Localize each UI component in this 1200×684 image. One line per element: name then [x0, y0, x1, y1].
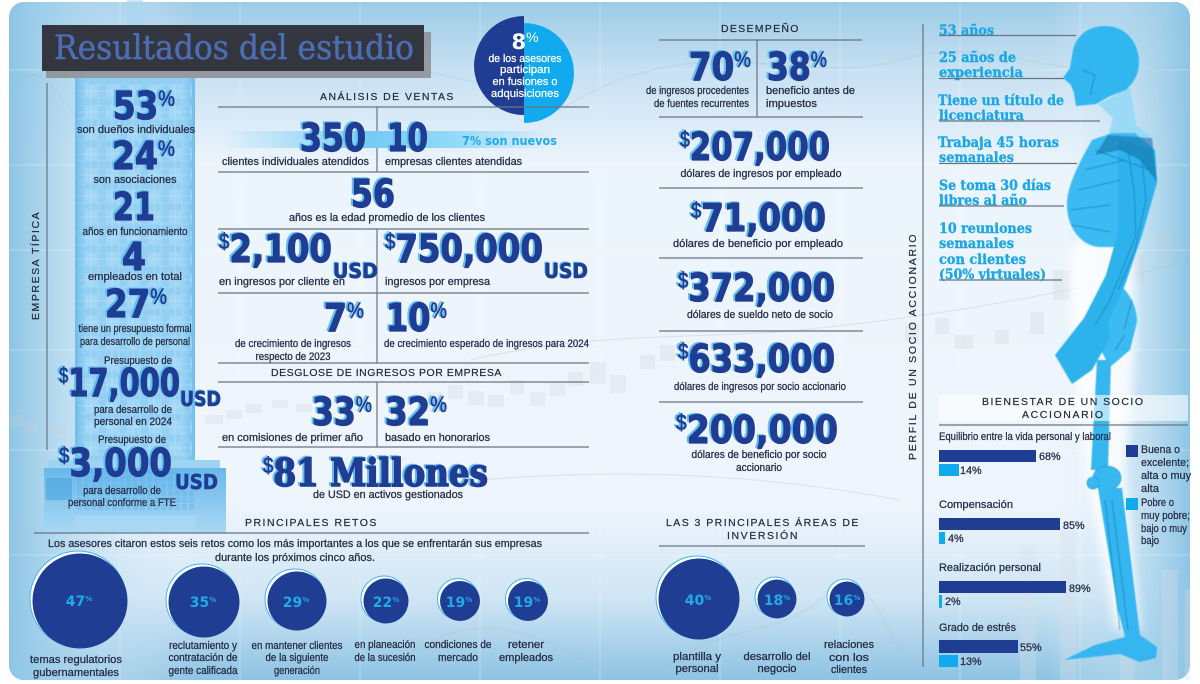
circle: 47% [30, 551, 128, 679]
stat: 38%: 38 [767, 45, 820, 89]
arm and hand [1055, 140, 1157, 384]
icon: tower illustration [44, 0, 226, 533]
stat: 21: 21 [113, 185, 155, 229]
stat: $81 Millones: 81 Millones [274, 450, 488, 495]
stat: 27%: % [150, 284, 167, 309]
stat: $633,000: $ [678, 339, 688, 364]
circle: 35%: gente calificada [168, 665, 238, 677]
stat: 350 clientes: clientes individuales atendidos [222, 156, 370, 168]
stat: $71,000 [673, 196, 843, 250]
legend: excelente; [1141, 457, 1189, 469]
circle: 22%: de la sucesión [354, 652, 416, 664]
stat: 38%: beneficio antes de [766, 85, 855, 97]
fact: 25 años de experiencia: experiencia [939, 65, 1023, 81]
fact: 45 horas semanales: Trabaja 45 horas [938, 135, 1059, 151]
stat: 53% [77, 84, 196, 136]
stat: 4: 4 [122, 235, 146, 279]
panel: perfil de un socio accionario [907, 22, 1100, 667]
heading: bienestar [939, 395, 1188, 421]
stat: $17,000 USD: $ [59, 363, 68, 388]
fact: 10 reuniones semanales: 10 reuniones [939, 221, 1032, 237]
stat: $200,000: accionario [736, 462, 782, 474]
legend: alta o muy [1141, 470, 1192, 482]
circle: 40% [656, 556, 740, 675]
callout: 8% de los asesores: 8 [511, 30, 526, 54]
highlight bar [222, 131, 552, 148]
circle: 18%: 18 [764, 593, 783, 609]
stat: 27%: 27 [105, 282, 158, 326]
circle: 29%: generación [274, 665, 320, 677]
circle: 35%: 35 [190, 595, 209, 611]
circle: 19% retener: retener [508, 639, 544, 651]
chart: grado de estrés [939, 622, 1042, 668]
stat: 70%: 70 [689, 45, 742, 89]
stat: $17,000 USD: 17,000 [68, 361, 180, 405]
chart: compensación: 4% [948, 533, 964, 545]
fact: título de licenciatura: Tiene un título de [938, 93, 1064, 109]
panel: bienestar de un socio accionario [939, 395, 1192, 668]
circle: 22%: en planeación [354, 639, 416, 651]
title: Resultados del estudio [54, 28, 414, 68]
stat: 24%: % [158, 136, 175, 161]
stat: $200,000: dólares de beneficio por socio [692, 449, 826, 461]
intro text [48, 538, 543, 564]
stat: 32%: % [430, 392, 447, 417]
heading: áreas de inversión [666, 516, 861, 542]
chart: realización personal: 2% [945, 596, 961, 608]
chart: realización personal [939, 562, 1091, 608]
stat: 7%: respecto de 2023 [256, 351, 330, 363]
panel: las 3 principales áreas de inversión [656, 516, 875, 676]
chart: grado de estrés: 55% [1020, 642, 1042, 654]
chart: grado de estrés: 13% [960, 656, 982, 668]
stat: 10%: de crecimiento esperado de ingresos para 2024 [384, 338, 589, 350]
stat: $17,000 USD [59, 355, 221, 428]
stat: 7%: % [347, 298, 364, 323]
circle: 29%: 29 [283, 595, 302, 611]
circle: 22%: 22 [373, 595, 392, 611]
stat: 32%: basado en honorarios [385, 432, 491, 444]
note: 7% son nuevos: 7% son nuevos [462, 133, 557, 148]
fact: 30 días libres: Se toma 30 días [939, 178, 1051, 194]
stat: 350 clientes [222, 116, 370, 168]
stat: 70%: de ingresos procedentes [646, 85, 750, 97]
circle: 35%: reclutamiento y [169, 640, 238, 652]
stat: 32% [385, 390, 491, 444]
circle: 19% condiciones [424, 578, 492, 664]
fact: 10 reuniones semanales: con clientes [939, 252, 1026, 268]
stat: $633,000 [674, 337, 846, 393]
stat: $71,000: $ [691, 198, 701, 223]
circle: 40%: plantilla y [673, 651, 722, 663]
stat: $2,100 USD: $ [219, 229, 229, 254]
heading: áreas de inversión: LAS 3 PRINCIPALES ÁREAS DE [666, 516, 861, 529]
fact: 10 reuniones semanales [939, 221, 1062, 283]
circle: 40%: % [704, 594, 711, 602]
circle: 47%: % [85, 595, 92, 603]
stat: $17,000 USD: personal en 2024 [94, 416, 172, 428]
stat: 70%: de fuentes recurrentes [654, 98, 750, 110]
circle: 29%: % [302, 596, 309, 604]
chart: equilibrio: 14% [960, 465, 982, 477]
stat: $372,000: dólares de sueldo neto de socio [687, 309, 833, 321]
illustration: human skeleton figure [1055, 26, 1157, 662]
heading: principales retos: PRINCIPALES RETOS [245, 517, 379, 529]
circle: 16%: relaciones [824, 639, 875, 651]
callout: 8% de los asesores [474, 16, 574, 123]
stat: 10%: % [431, 298, 447, 323]
stat: 53%: 53 [113, 84, 166, 128]
stat: 33%: 33 [312, 390, 365, 434]
stat: $17,000 USD: USD [180, 387, 221, 411]
stat: 24%: son asociaciones [94, 174, 177, 186]
callout: 8% de los asesores: participan [500, 64, 550, 76]
fact: 10 reuniones semanales: (50% virtuales) [939, 267, 1046, 283]
heading: empresa típica: EMPRESA TÍPICA [29, 210, 42, 320]
panel: desglose de ingresos por empresa [218, 367, 589, 501]
leg [1091, 360, 1111, 470]
circle: 40%: 40 [685, 593, 704, 609]
legend [1126, 444, 1192, 547]
stat: 33%: en comisiones de primer año [222, 432, 363, 444]
circle: 19% condiciones: % [465, 596, 472, 604]
callout: 8% de los asesores: adquisiciones [491, 88, 560, 100]
legend: Pobre o [1141, 497, 1174, 509]
chart: compensación: 85% [1063, 520, 1085, 532]
callout: 8% de los asesores: % [526, 29, 539, 45]
fact: título de licenciatura: licenciatura [939, 108, 1024, 124]
circle: 16%: % [853, 594, 860, 602]
stat: $2,100 USD [219, 227, 378, 288]
stat: 53%: son dueños individuales [77, 124, 196, 136]
heading: desglose de ingresos: DESGLOSE DE INGRESOS POR EMPRESA [271, 367, 504, 379]
stat: $2,100 USD: en ingresos por cliente en [219, 276, 345, 288]
stat: $207,000 [680, 125, 842, 180]
fact: 30 días libres: libres al año [939, 192, 1027, 209]
stat: $3,000 USD: USD [175, 470, 218, 494]
intro text: durante los próximos cinco años. [215, 552, 375, 564]
stat: 38%: % [811, 47, 827, 72]
stat: 7% [235, 296, 364, 363]
torso [1067, 133, 1157, 247]
stat: 10 empresas: 10 [387, 116, 428, 160]
stat: $750,000 USD: USD [544, 259, 588, 283]
stat: 10% [384, 296, 589, 350]
circle: 47%: temas regulatorios [30, 654, 123, 666]
stat: $17,000 USD: para desarrollo de [94, 404, 172, 416]
fact: 53 años: 53 años [939, 22, 994, 39]
stat: $372,000 [678, 266, 835, 321]
stat: $200,000: $ [676, 410, 687, 435]
heading: bienestar: ACCIONARIO [1022, 409, 1106, 421]
stat: 7%: 7 [324, 296, 350, 340]
stat: 27% [78, 282, 192, 348]
circle: 16% [824, 579, 875, 676]
circle: 19% retener: empleados [499, 652, 554, 664]
circle: 19% condiciones: condiciones de [424, 639, 492, 651]
stat: $750,000 USD: 750,000 [395, 227, 543, 271]
stat: $3,000 USD: Presupuesto de [98, 434, 166, 446]
stat: 21 [82, 185, 188, 238]
stat: 33%: % [356, 392, 372, 417]
circle: 19% condiciones: mercado [438, 652, 478, 664]
stat: $3,000 USD: 3,000 [69, 441, 172, 485]
stat: 10 empresas [385, 116, 523, 168]
stat: 32%: 32 [385, 390, 438, 434]
stat: $71,000: dólares de beneficio por empleado [673, 238, 843, 250]
fact: 25 años de experiencia: 25 años de [939, 49, 1016, 66]
circle: 40%: personal [676, 663, 718, 675]
stat: 33% [222, 390, 372, 444]
heading: perfil de un socio accionario: PERFIL DE UN SOCIO ACCIONARIO [907, 232, 919, 460]
stat: 10 empresas: empresas clientes atendidas [385, 156, 523, 168]
callout: 8% de los asesores: en fusiones o [492, 76, 558, 88]
panel: principales retos [30, 517, 589, 679]
chart: equilibrio: 68% [1039, 451, 1061, 463]
legend: muy pobre; [1141, 510, 1190, 522]
chart: equilibrio: Equilibrio entre la vida personal y laboral [939, 431, 1111, 443]
circle: 29% [252, 569, 343, 677]
stat: $200,000: 200,000 [687, 408, 838, 452]
stat: 27%: para desarrollo de personal [80, 336, 190, 348]
stat: $750,000 USD [385, 227, 588, 288]
circle: 19% retener: % [533, 596, 540, 604]
circle: 19% condiciones: 19 [446, 595, 465, 611]
circle: 22%: % [392, 596, 399, 604]
stat: $750,000 USD: $ [385, 229, 395, 254]
fact: 25 años de experiencia [939, 49, 1064, 81]
stat: 56 años: 56 [351, 172, 395, 216]
stat: $17,000 USD: Presupuesto de [104, 355, 172, 367]
stat: 70% [646, 45, 751, 110]
stat: 70%: % [734, 47, 751, 72]
circle: 35%: % [209, 596, 216, 604]
pale neck [1098, 88, 1152, 137]
stat: $633,000: 633,000 [688, 337, 835, 381]
stat: 10%: 10 [386, 296, 439, 340]
stat: $71,000: 71,000 [701, 196, 826, 240]
stat: 4: empleados en total [88, 271, 182, 283]
chart: grado de estrés: Grado de estrés [939, 622, 1017, 634]
fact: 45 horas semanales [938, 135, 1077, 166]
fact: 45 horas semanales: semanales [939, 150, 1014, 166]
circle: 35%: contratación de [168, 652, 238, 664]
fact: 30 días libres [939, 178, 1064, 209]
chart: realización personal: Realización personal [939, 562, 1041, 574]
circle: 18%: % [783, 594, 790, 602]
circle: 18% [744, 577, 810, 675]
circle: 47%: 47 [66, 594, 85, 610]
circle: 19% retener [499, 578, 554, 664]
stat: 24% [94, 134, 177, 186]
chart: equilibrio [939, 431, 1111, 477]
stat: $200,000 [676, 408, 838, 474]
panel: análisis de ventas [218, 90, 589, 363]
stat: 38%: impuestos [766, 98, 818, 110]
stat: 53%: % [158, 86, 175, 111]
legend: Buena o [1141, 444, 1180, 456]
stat: $750,000 USD: ingresos por empresa [385, 276, 490, 288]
legend: alta [1141, 483, 1159, 495]
fact: 53 años [939, 22, 1076, 39]
circle: 35% [166, 564, 240, 677]
stat: 7%: de crecimiento de ingresos [235, 338, 352, 350]
fact: 10 reuniones semanales: semanales [939, 236, 1014, 252]
chart: compensación: Compensación [939, 499, 1013, 511]
legend: bajo o muy [1141, 523, 1188, 535]
stat: $2,100 USD: USD [333, 259, 378, 283]
stat: $372,000: $ [678, 268, 688, 293]
stat: 38% [766, 45, 855, 110]
heading: desempeño: DESEMPEÑO [721, 22, 801, 35]
circle: 29%: en mantener clientes [252, 640, 343, 652]
legend: bajo [1141, 535, 1159, 547]
chart: compensación [939, 499, 1085, 545]
stat: $207,000: 207,000 [690, 125, 830, 169]
circle: 19% retener: 19 [514, 595, 533, 611]
panel: desempeño [646, 22, 863, 474]
circle: 22% [354, 576, 416, 664]
stat: $3,000 USD: para desarrollo de [83, 485, 161, 497]
stat: $3,000 USD: personal conforme a FTE [68, 497, 176, 509]
circle: 18%: negocio [758, 663, 796, 675]
pelvis [1098, 287, 1137, 367]
head [1063, 26, 1139, 106]
chart: realización personal: 89% [1069, 583, 1091, 595]
circle: 47%: gubernamentales [33, 667, 120, 679]
heading: análisis de ventas: ANÁLISIS DE VENTAS [320, 90, 456, 103]
stat: 56 años [289, 172, 486, 224]
stat: $3,000 USD [59, 434, 218, 509]
heading: áreas de inversión: INVERSIÓN [727, 529, 800, 542]
stat: $2,100 USD: 2,100 [229, 227, 332, 271]
stat: 350 clientes: 350 [300, 116, 366, 160]
stat: 56 años: años es la edad promedio de los clientes [289, 212, 486, 224]
circle: 16%: 16 [834, 593, 853, 609]
circle: 16%: clientes [831, 664, 868, 676]
stat: 24%: 24 [112, 134, 165, 178]
circle: 18%: desarrollo del [744, 651, 810, 663]
stat: 21: años en funcionamiento [82, 226, 188, 238]
circle: 16%: con los [829, 652, 870, 664]
panel: empresa típica [29, 83, 221, 509]
stat: $633,000: dólares de ingresos por socio accionario [674, 381, 846, 393]
stat: $207,000: dólares de ingresos por empleado [680, 168, 842, 180]
stat: 4 [88, 235, 182, 283]
fact: título de licenciatura [938, 93, 1100, 124]
circle: 29%: de la siguiente [266, 652, 328, 664]
stat: $81 Millones: $ [263, 453, 274, 478]
callout: 8% de los asesores: de los asesores [488, 53, 562, 65]
stat: $372,000: 372,000 [688, 266, 835, 310]
stat: 27%: tiene un presupuesto formal [78, 323, 192, 335]
stat: $207,000: $ [680, 127, 690, 152]
stat: $3,000 USD: $ [59, 443, 69, 468]
heading: bienestar: BIENESTAR DE UN SOCIO [982, 396, 1146, 408]
stat: $81 Millones: de USD en activos gestionados [313, 489, 464, 501]
intro text: Los asesores citaron estos seis retos como los más importantes a los que se enfrentarán sus empresas [48, 538, 543, 550]
